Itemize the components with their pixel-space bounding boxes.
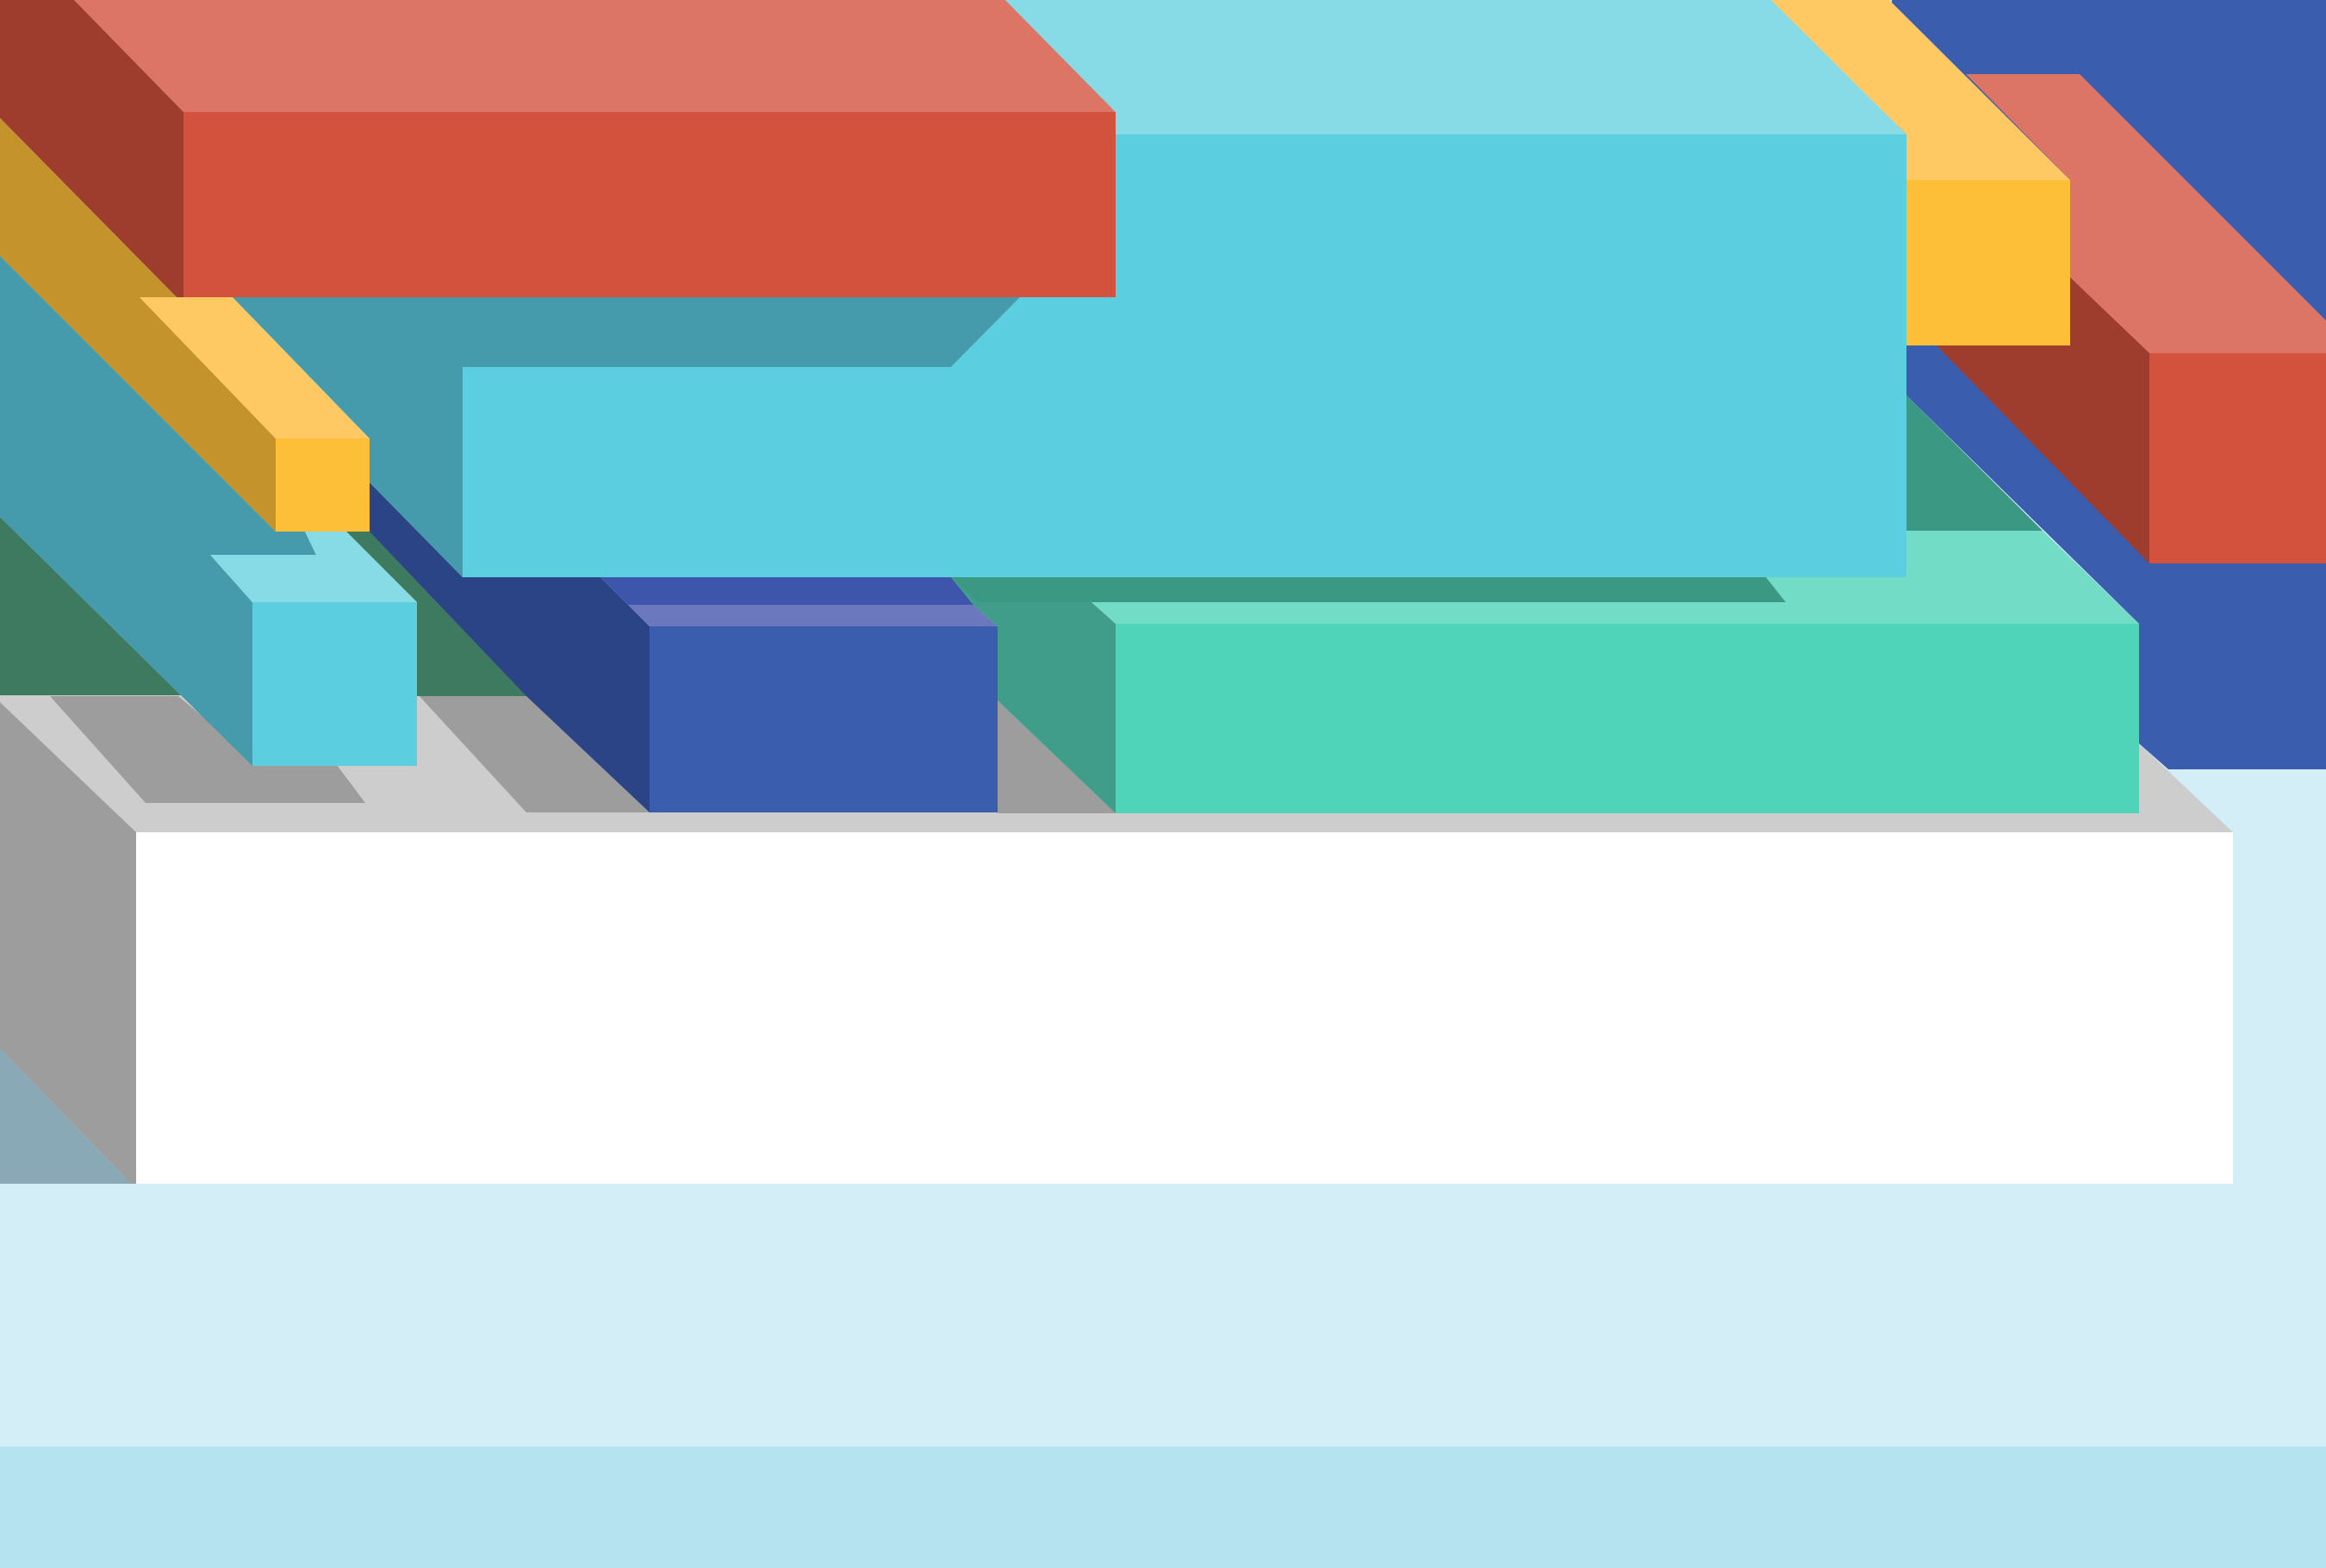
back blue block bbox=[1892, 0, 2326, 769]
red front bbox=[183, 112, 1116, 297]
large cyan front bbox=[463, 134, 1906, 577]
gold bar right bbox=[1771, 0, 2070, 345]
gold top bbox=[140, 297, 370, 439]
mint block bbox=[951, 395, 2139, 813]
grey gap triangle bbox=[998, 700, 1116, 813]
gold front bbox=[276, 439, 370, 532]
platform cast shadow left bbox=[50, 696, 365, 803]
mint side bbox=[951, 577, 1116, 813]
gold side bbox=[0, 118, 276, 532]
blue block bbox=[370, 482, 998, 812]
large cyan side bbox=[233, 297, 1020, 577]
platform top bbox=[0, 695, 2233, 832]
right gold top bbox=[1771, 0, 2070, 180]
platform cast shadow right bbox=[417, 694, 655, 812]
right red side bbox=[1937, 277, 2149, 563]
blue top far bbox=[600, 577, 973, 605]
platform shadow triangle bbox=[0, 1048, 131, 1184]
small cyan block bbox=[0, 256, 417, 766]
blue top near bbox=[628, 605, 998, 626]
red side bbox=[0, 0, 183, 297]
blue front bbox=[650, 626, 998, 812]
mint top bbox=[1091, 531, 2139, 624]
red top bbox=[74, 0, 1116, 112]
dark green block right bbox=[346, 532, 538, 696]
right gold front bbox=[1906, 180, 2070, 345]
red block left bbox=[0, 0, 1116, 297]
large cyan block bbox=[233, 0, 1906, 577]
navy side bbox=[370, 482, 650, 812]
bottom band bbox=[0, 1447, 2326, 1568]
gold bar left bbox=[0, 118, 370, 532]
small cyan top bbox=[210, 532, 417, 602]
small cyan side bbox=[0, 256, 316, 766]
right red front bbox=[2149, 353, 2326, 563]
dark green block left bbox=[0, 517, 181, 695]
small cyan front bbox=[252, 602, 417, 766]
platform left side bbox=[0, 702, 136, 1184]
white platform block bbox=[0, 695, 2233, 1184]
right red top bbox=[1966, 74, 2326, 353]
mint back side bbox=[1906, 395, 2043, 531]
large cyan top bbox=[1005, 0, 1906, 134]
red block right bbox=[1937, 74, 2326, 563]
platform front bbox=[136, 832, 2233, 1184]
mint shadow strip bbox=[951, 577, 1786, 602]
mint front bbox=[1116, 624, 2139, 813]
